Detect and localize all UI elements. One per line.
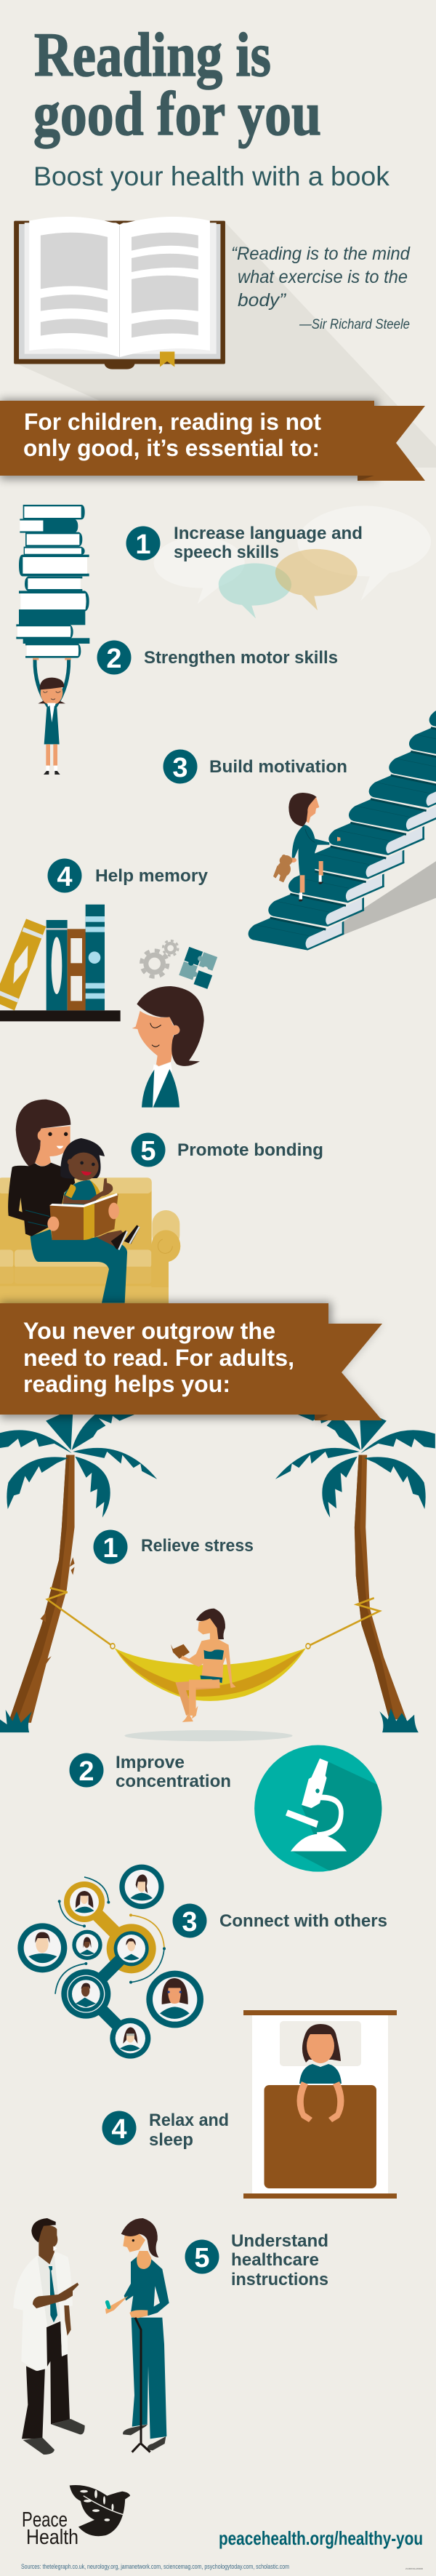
woman reading in hammock — [171, 1609, 235, 1722]
item 1: language: 1 — [135, 529, 151, 560]
adult item 3: connect — [173, 1904, 387, 1937]
icon: staircase of books — [249, 704, 436, 951]
adult item 2: concentration: concentration — [116, 1772, 231, 1791]
adult item 3: connect: 3 — [182, 1907, 198, 1937]
icon: speech bubbles — [154, 506, 431, 618]
title — [33, 20, 321, 148]
right palm tree — [275, 1412, 435, 1732]
logo text — [22, 2508, 78, 2549]
sources: Sources: thetelegraph.co.uk, neurology.org, jamanetwork.com, sciencemag.com, psychologytoday.com, scholastic.com — [21, 2563, 289, 2571]
adult item 2: concentration: 2 — [78, 1756, 94, 1787]
quote: what exercise is to the — [238, 267, 408, 287]
doctor — [13, 2218, 85, 2455]
icon: social network — [17, 1865, 203, 2059]
quote: “Reading is to the mind — [231, 244, 411, 264]
girl climbing stairs with teddy — [273, 793, 341, 901]
logo text: Peace — [22, 2508, 68, 2532]
quote: —Sir Richard Steele — [299, 317, 410, 332]
adult item 4: sleep — [102, 2111, 229, 2150]
banner: adults — [0, 1302, 382, 1420]
print code: 23-MRKNG-#00000 — [405, 2567, 423, 2570]
item 1: language: speech skills — [174, 543, 279, 562]
logo text: Health — [26, 2526, 78, 2549]
adult item 3: connect: Connect with others — [219, 1911, 387, 1931]
icon: bookshelf — [0, 905, 121, 1021]
item 2: motor skills: Strengthen motor skills — [144, 648, 338, 668]
adult item 5: healthcare: healthcare — [231, 2250, 319, 2270]
icon: stack of books — [16, 505, 89, 658]
adult item 4: sleep: 4 — [111, 2114, 127, 2145]
hammock — [47, 1588, 379, 1741]
adult item 5: healthcare: Understand — [231, 2231, 328, 2251]
item 5: bonding — [131, 1133, 323, 1167]
title: Reading is — [34, 20, 271, 89]
title: good for you — [33, 79, 321, 148]
banner: adults: need to read. For adults, — [23, 1345, 294, 1371]
quote: body” — [238, 290, 287, 311]
adult item 4: sleep: Relax and — [149, 2111, 229, 2130]
adult item 1: stress: Relieve stress — [141, 1536, 254, 1556]
item 1: language: Increase language and — [174, 524, 363, 543]
banner: children — [0, 399, 425, 481]
icon: gears — [142, 940, 178, 977]
banner: adults: reading helps you: — [23, 1371, 230, 1397]
icon: puzzle — [178, 947, 219, 989]
banner: children: only good, it’s essential to: — [23, 435, 320, 461]
item 4: memory — [48, 858, 209, 893]
adult item 1: stress — [93, 1530, 254, 1564]
item 3: motivation — [163, 749, 347, 784]
item 3: motivation: 3 — [172, 753, 188, 783]
patient with cane — [105, 2218, 169, 2452]
banner: adults: You never outgrow the — [23, 1318, 275, 1344]
icon: sofa — [0, 1177, 180, 1305]
item 5: bonding: Promote bonding — [177, 1140, 323, 1160]
adult item 5: healthcare: instructions — [231, 2270, 328, 2289]
adult item 4: sleep: sleep — [149, 2130, 193, 2150]
item 2: motor skills: 2 — [106, 644, 122, 674]
item 4: memory: Help memory — [95, 866, 209, 886]
icon: microscope — [254, 1745, 382, 1872]
book long shadow — [17, 223, 436, 468]
item 2: motor skills — [97, 640, 338, 675]
item 1: language — [126, 524, 363, 562]
subtitle: Boost your health with a book — [33, 161, 389, 191]
item 4: memory: 4 — [57, 862, 73, 892]
quote — [231, 244, 411, 332]
adult item 2: concentration: Improve — [116, 1753, 185, 1772]
woman with eyes closed — [132, 986, 204, 1108]
banner: children: For children, reading is not — [24, 409, 321, 435]
adult item 5: healthcare: 5 — [194, 2243, 210, 2273]
mother and child reading — [8, 1100, 140, 1303]
girl holding books — [33, 658, 71, 775]
icon: open book — [14, 217, 225, 369]
adult item 2: concentration — [70, 1753, 231, 1791]
adult item 1: stress: 1 — [102, 1533, 118, 1564]
item 5: bonding: 5 — [140, 1136, 156, 1167]
adult item 5: healthcare — [185, 2231, 328, 2289]
left palm tree — [0, 1412, 157, 1732]
item 3: motivation: Build motivation — [209, 757, 347, 777]
logo: dove — [70, 2485, 130, 2536]
icon: bed with sleeping woman — [243, 2010, 397, 2199]
